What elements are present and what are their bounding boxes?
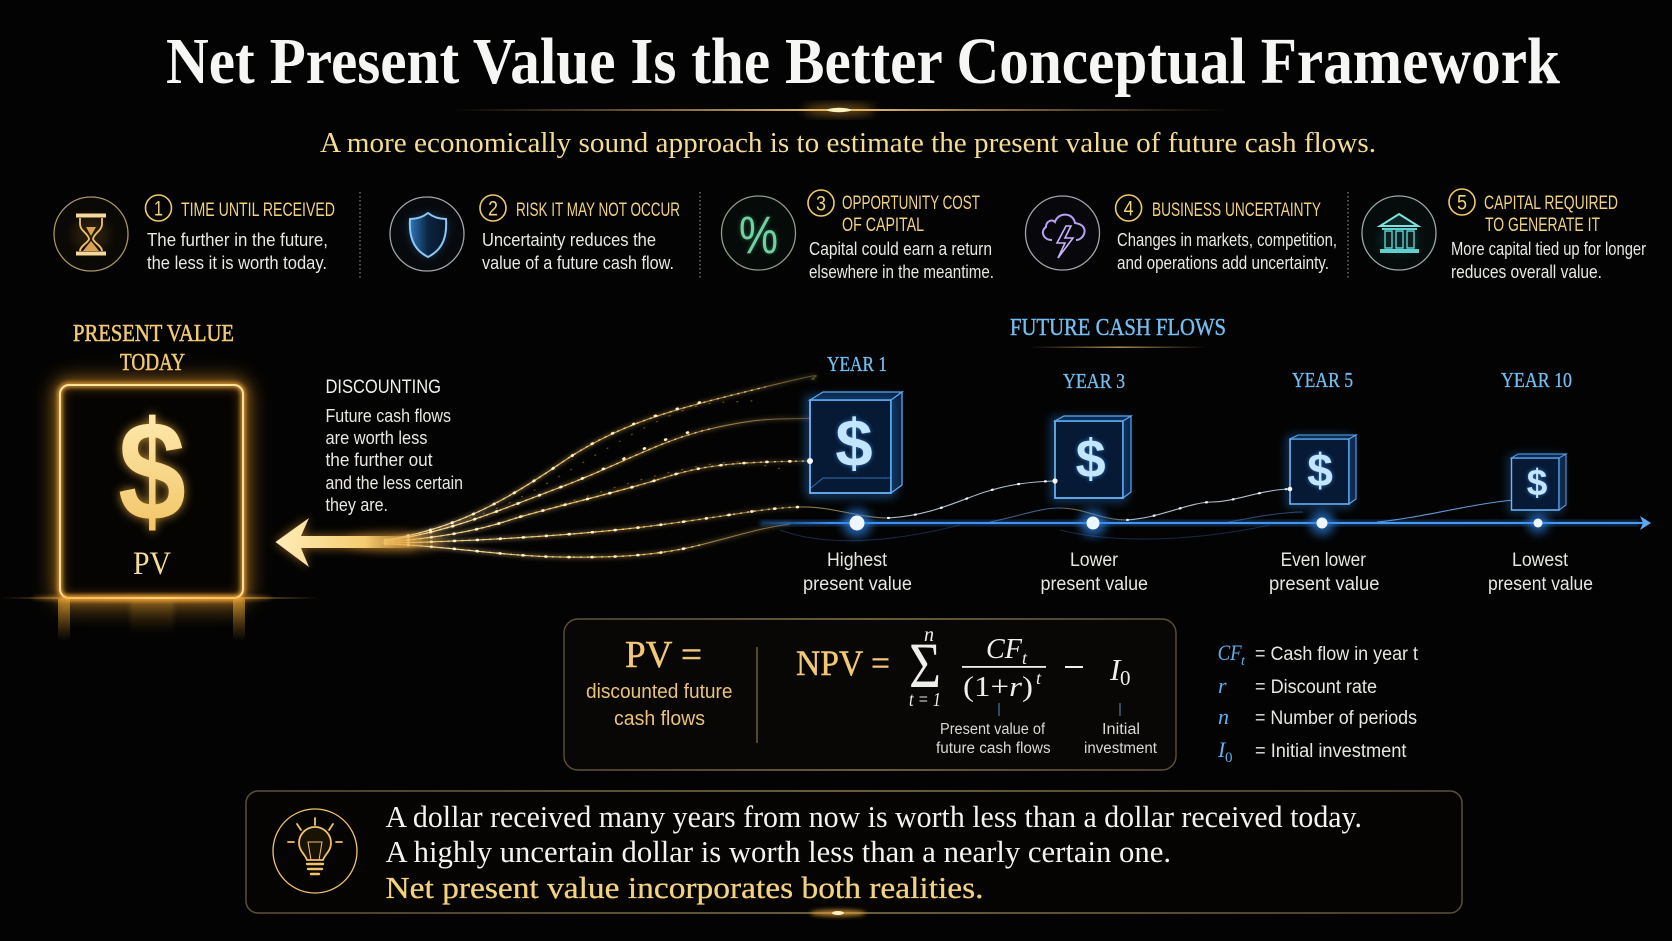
icon: dollar cube: $ [1076, 429, 1106, 489]
NPV equation: Σ [909, 630, 941, 702]
body: elsewhere in the meantime. [809, 261, 994, 282]
body: value of a future cash flow. [482, 252, 674, 273]
icon: dollar cube: $ [1307, 444, 1333, 496]
number badge 3: 3 [816, 192, 826, 216]
cash flow year 5 [1269, 368, 1380, 595]
NPV equation [796, 624, 1130, 711]
panel: driver 4 business uncertainty [1026, 195, 1337, 273]
PV definition: discounted future [586, 681, 732, 703]
heading [842, 193, 980, 236]
legend: variables: I [1217, 737, 1227, 762]
NPV equation: t = 1 [909, 689, 941, 711]
icon: dollar cube small [1512, 454, 1566, 510]
icon: shield [390, 197, 464, 271]
icon: dollar cube large: $ [835, 406, 873, 481]
icon: dollar cube [1052, 416, 1131, 498]
body: Capital could earn a return [809, 238, 992, 259]
icon: dollar cube small: $ [1527, 462, 1548, 503]
heading: future cash flows: FUTURE CASH FLOWS [1010, 315, 1226, 341]
arrow and gold streams [276, 376, 816, 567]
number badge 1: 1 [154, 198, 163, 220]
icon: storm cloud [1026, 196, 1100, 270]
body [809, 238, 994, 282]
subtitle: A more economically sound approach is to estimate the present value of future cash flows. [320, 127, 1376, 159]
legend: variables: = Discount rate [1255, 677, 1377, 698]
annotation: present value of future cash flows: Present value of [940, 721, 1046, 738]
number badge 2: 2 [488, 198, 498, 220]
caption [1269, 550, 1380, 595]
label: YEAR 3 [1063, 369, 1125, 393]
body: reduces overall value. [1451, 261, 1602, 282]
caption: Lowest [1512, 550, 1569, 571]
number badge 5 [1449, 189, 1475, 215]
heading: BUSINESS UNCERTAINTY [1152, 200, 1321, 221]
title rule [450, 105, 1230, 115]
caption: present value [803, 574, 912, 595]
body: The further in the future, [147, 229, 328, 250]
number badge 4 [1116, 195, 1142, 221]
NPV equation: NPV = [796, 643, 890, 683]
heading: CAPITAL REQUIRED [1484, 193, 1618, 214]
takeaway text: A highly uncertain dollar is worth less than a nearly certain one. [386, 834, 1171, 869]
timeline [760, 481, 1651, 541]
heading: RISK IT MAY NOT OCCUR [516, 200, 680, 221]
heading: TIME UNTIL RECEIVED [181, 200, 335, 221]
annotation: initial investment [1084, 703, 1158, 757]
heading: OPPORTUNITY COST [842, 193, 980, 214]
legend: variables [1217, 640, 1419, 766]
caption: present value [1040, 574, 1148, 595]
PV definition [586, 634, 732, 730]
panel: takeaway [246, 791, 1462, 916]
icon: dollar cube small: $ [1527, 462, 1548, 503]
number badge 2 [480, 195, 506, 221]
panel: driver 2 risk [390, 195, 680, 273]
heading: present value today: TODAY [120, 350, 185, 376]
takeaway text: A dollar received many years from now is worth less than a dollar received today. [386, 799, 1362, 834]
heading [1484, 193, 1618, 236]
caption: present value [1269, 574, 1380, 595]
panel: formula [564, 619, 1176, 770]
label: YEAR 5 [1292, 368, 1353, 392]
caption [1040, 550, 1148, 595]
text: discounting: Future cash flows [326, 405, 451, 426]
number badge 4: 4 [1124, 198, 1134, 220]
heading: present value today [73, 321, 234, 376]
icon: percent: % [739, 206, 778, 265]
legend: variables: CF [1218, 640, 1242, 665]
cash flow year 1 [803, 352, 912, 595]
PV label: PV [133, 546, 171, 582]
icon: dollar cube: $ [1076, 429, 1106, 489]
text: discounting: and the less certain [326, 472, 463, 493]
panel: driver 5 capital required [1362, 189, 1646, 282]
caption [1488, 550, 1593, 595]
number badge 3 [808, 190, 834, 216]
icon: percent: % [739, 206, 778, 265]
timeline nodes [843, 509, 1548, 537]
icon: percent [722, 196, 796, 270]
NPV equation: I [1109, 652, 1122, 687]
caption: present value [1488, 574, 1593, 595]
PV definition: cash flows [614, 708, 705, 730]
caption: Even lower [1281, 550, 1367, 571]
NPV equation: 0 [1120, 666, 1130, 690]
icon: dollar cube [1288, 435, 1356, 504]
caption: Lower [1070, 550, 1119, 571]
takeaway text: Net present value incorporates both realities. [386, 870, 984, 905]
icon: hourglass [54, 197, 128, 271]
caption [803, 550, 912, 595]
body [1117, 229, 1337, 273]
annotation: initial investment: investment [1084, 740, 1158, 757]
annotation: present value of future cash flows: future cash flows [936, 740, 1051, 757]
icon: dollar cube large: $ [835, 406, 873, 481]
NPV equation: (1+r) [963, 671, 1033, 703]
body [1451, 238, 1646, 282]
text: discounting: they are. [326, 494, 388, 515]
icon: gold dollar: $ [118, 392, 186, 551]
NPV equation: CF [986, 634, 1023, 665]
legend: variables: = Cash flow in year t [1255, 644, 1419, 665]
heading: OF CAPITAL [842, 215, 924, 236]
legend: variables: = Initial investment [1255, 741, 1407, 762]
body: and operations add uncertainty. [1117, 252, 1329, 273]
NPV equation: t [1022, 648, 1028, 668]
number badge 5: 5 [1457, 192, 1467, 214]
takeaway text [386, 799, 1362, 905]
text: discounting: are worth less [326, 427, 428, 448]
NPV equation: n [924, 624, 934, 646]
body: Changes in markets, competition, [1117, 229, 1337, 250]
number badge 1 [146, 195, 172, 221]
annotation: present value of future cash flows [936, 703, 1051, 757]
cash flow year 3 [1040, 369, 1148, 595]
icon: bank [1362, 196, 1436, 270]
body [482, 229, 674, 273]
panel: driver 1 time until received [54, 195, 335, 273]
heading: present value today: PRESENT VALUE [73, 321, 234, 347]
PV definition: PV = [625, 634, 702, 676]
icon: light bulb [273, 809, 357, 893]
panel: PV card [0, 385, 320, 641]
legend: variables: t [1241, 654, 1246, 669]
text: discounting [326, 377, 463, 515]
icon: gold dollar: $ [118, 392, 186, 551]
icon: dollar cube: $ [1307, 444, 1333, 496]
label: YEAR 1 [827, 352, 887, 376]
text: discounting: the further out [326, 449, 432, 470]
body: the less it is worth today. [147, 252, 327, 273]
panel: driver 3 opportunity cost [722, 190, 994, 282]
body: Uncertainty reduces the [482, 229, 656, 250]
NPV equation: t [1036, 668, 1042, 688]
legend: variables: = Number of periods [1255, 708, 1417, 729]
legend: variables: 0 [1225, 750, 1232, 766]
text: discounting: DISCOUNTING [326, 377, 441, 398]
legend: variables: r [1218, 673, 1227, 698]
legend: variables: n [1218, 704, 1229, 729]
icon: dollar cube large [807, 392, 902, 493]
caption: Highest [827, 550, 888, 571]
floor reflection [0, 595, 320, 641]
body [147, 229, 328, 273]
label: YEAR 10 [1501, 368, 1572, 392]
annotation: initial investment: Initial [1102, 721, 1140, 738]
heading: TO GENERATE IT [1485, 215, 1600, 236]
cash flow year 10 [1488, 368, 1593, 595]
